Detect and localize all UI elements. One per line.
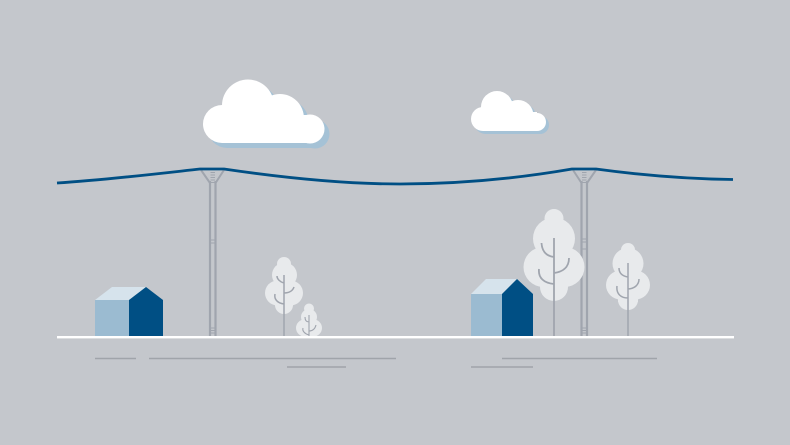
pylon: right [573, 170, 596, 336]
house: right [471, 279, 533, 336]
power line [57, 169, 733, 184]
house: left [95, 287, 163, 336]
ground line [57, 336, 734, 338]
tree: right medium [606, 243, 650, 336]
ground shadow lines [95, 358, 657, 367]
cloud: small [471, 91, 549, 134]
pylon: left [201, 170, 224, 336]
tree: left medium [265, 257, 303, 336]
cloud: large [203, 80, 330, 148]
tree: left small [296, 304, 322, 336]
tree: right large [524, 209, 584, 336]
